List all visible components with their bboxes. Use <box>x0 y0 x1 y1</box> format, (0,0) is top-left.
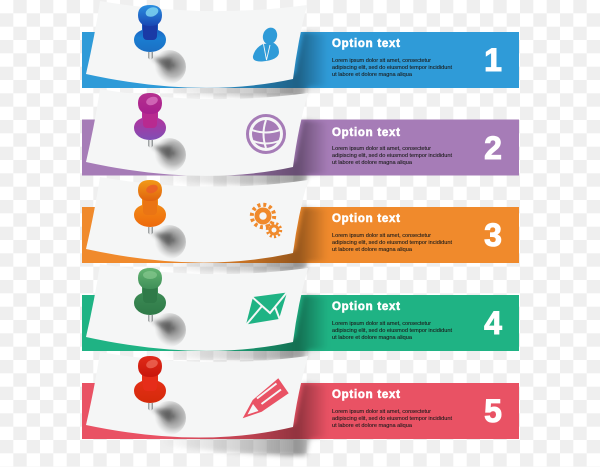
description 5: ut labore et dolore magna aliqua <box>332 423 413 429</box>
paper card 3 <box>86 177 308 263</box>
icon: envelope <box>246 291 288 325</box>
bar 2 <box>82 120 519 176</box>
pin 2: purple <box>134 93 166 148</box>
paper card 1 <box>86 1 307 88</box>
description 5 <box>332 409 452 429</box>
icon: gears <box>252 205 281 237</box>
paper shadow 1 <box>150 32 328 97</box>
number 2: 2 <box>484 130 502 166</box>
pin shadow 2 <box>152 138 186 172</box>
number 3: 3 <box>484 217 502 253</box>
description 1 <box>332 58 452 78</box>
pin 5: red <box>134 356 166 411</box>
description 2: ut labore et dolore magna aliqua <box>332 160 413 166</box>
number 4: 4 <box>484 305 502 341</box>
paper shadow 2 <box>150 120 328 185</box>
bar 3 <box>82 207 519 263</box>
paper card 2 <box>86 89 308 176</box>
description 4: adipiscing elit, sed do eiusmod tempor incididunt <box>332 328 452 334</box>
number 1: 1 <box>484 42 502 78</box>
description 4 <box>332 321 452 341</box>
description 4: Lorem ipsum dolor sit amet, consectetur <box>332 321 431 327</box>
bar 4 <box>82 295 519 351</box>
description 3: ut labore et dolore magna aliqua <box>332 247 413 253</box>
description 1: ut labore et dolore magna aliqua <box>332 72 413 78</box>
description 2: Lorem ipsum dolor sit amet, consectetur <box>332 146 431 152</box>
number 5: 5 <box>484 393 502 429</box>
pin shadow 3 <box>152 225 186 259</box>
icon: globe <box>248 116 284 152</box>
paper shadow 5 <box>150 383 328 456</box>
title 3: Option text <box>332 213 400 225</box>
icon: person <box>253 26 279 62</box>
title 2: Option text <box>332 127 400 139</box>
banner 5: red <box>82 352 519 456</box>
paper shadow 3 <box>150 207 328 272</box>
title 4: Option text <box>332 301 400 313</box>
banner 2: purple <box>82 89 519 185</box>
pin 4: green <box>134 268 166 323</box>
bar 1 <box>82 32 519 88</box>
pin shadow 5 <box>152 401 186 435</box>
description 2: adipiscing elit, sed do eiusmod tempor incididunt <box>332 153 452 159</box>
pin 1: blue <box>134 5 166 60</box>
description 1: adipiscing elit, sed do eiusmod tempor incididunt <box>332 65 452 71</box>
description 4: ut labore et dolore magna aliqua <box>332 335 413 341</box>
description 1: Lorem ipsum dolor sit amet, consectetur <box>332 58 431 64</box>
pin shadow 1 <box>152 50 186 84</box>
pin shadow 4 <box>152 313 186 347</box>
description 3: adipiscing elit, sed do eiusmod tempor incididunt <box>332 240 452 246</box>
description 3: Lorem ipsum dolor sit amet, consectetur <box>332 233 431 239</box>
description 3 <box>332 233 452 253</box>
paper card 5 <box>86 352 308 438</box>
description 2 <box>332 146 452 166</box>
banner 3: orange <box>82 177 519 272</box>
bar 5 <box>82 383 519 439</box>
icon: pencil <box>243 378 289 418</box>
paper card 4 <box>86 264 308 351</box>
description 5: adipiscing elit, sed do eiusmod tempor incididunt <box>332 416 452 422</box>
banner 4: green <box>82 264 519 360</box>
description 5: Lorem ipsum dolor sit amet, consectetur <box>332 409 431 415</box>
title 5: Option text <box>332 389 400 401</box>
banner 1: blue <box>82 1 519 97</box>
paper shadow 4 <box>150 295 328 360</box>
title 1: Option text <box>332 38 400 50</box>
pin 3: orange <box>134 180 166 235</box>
